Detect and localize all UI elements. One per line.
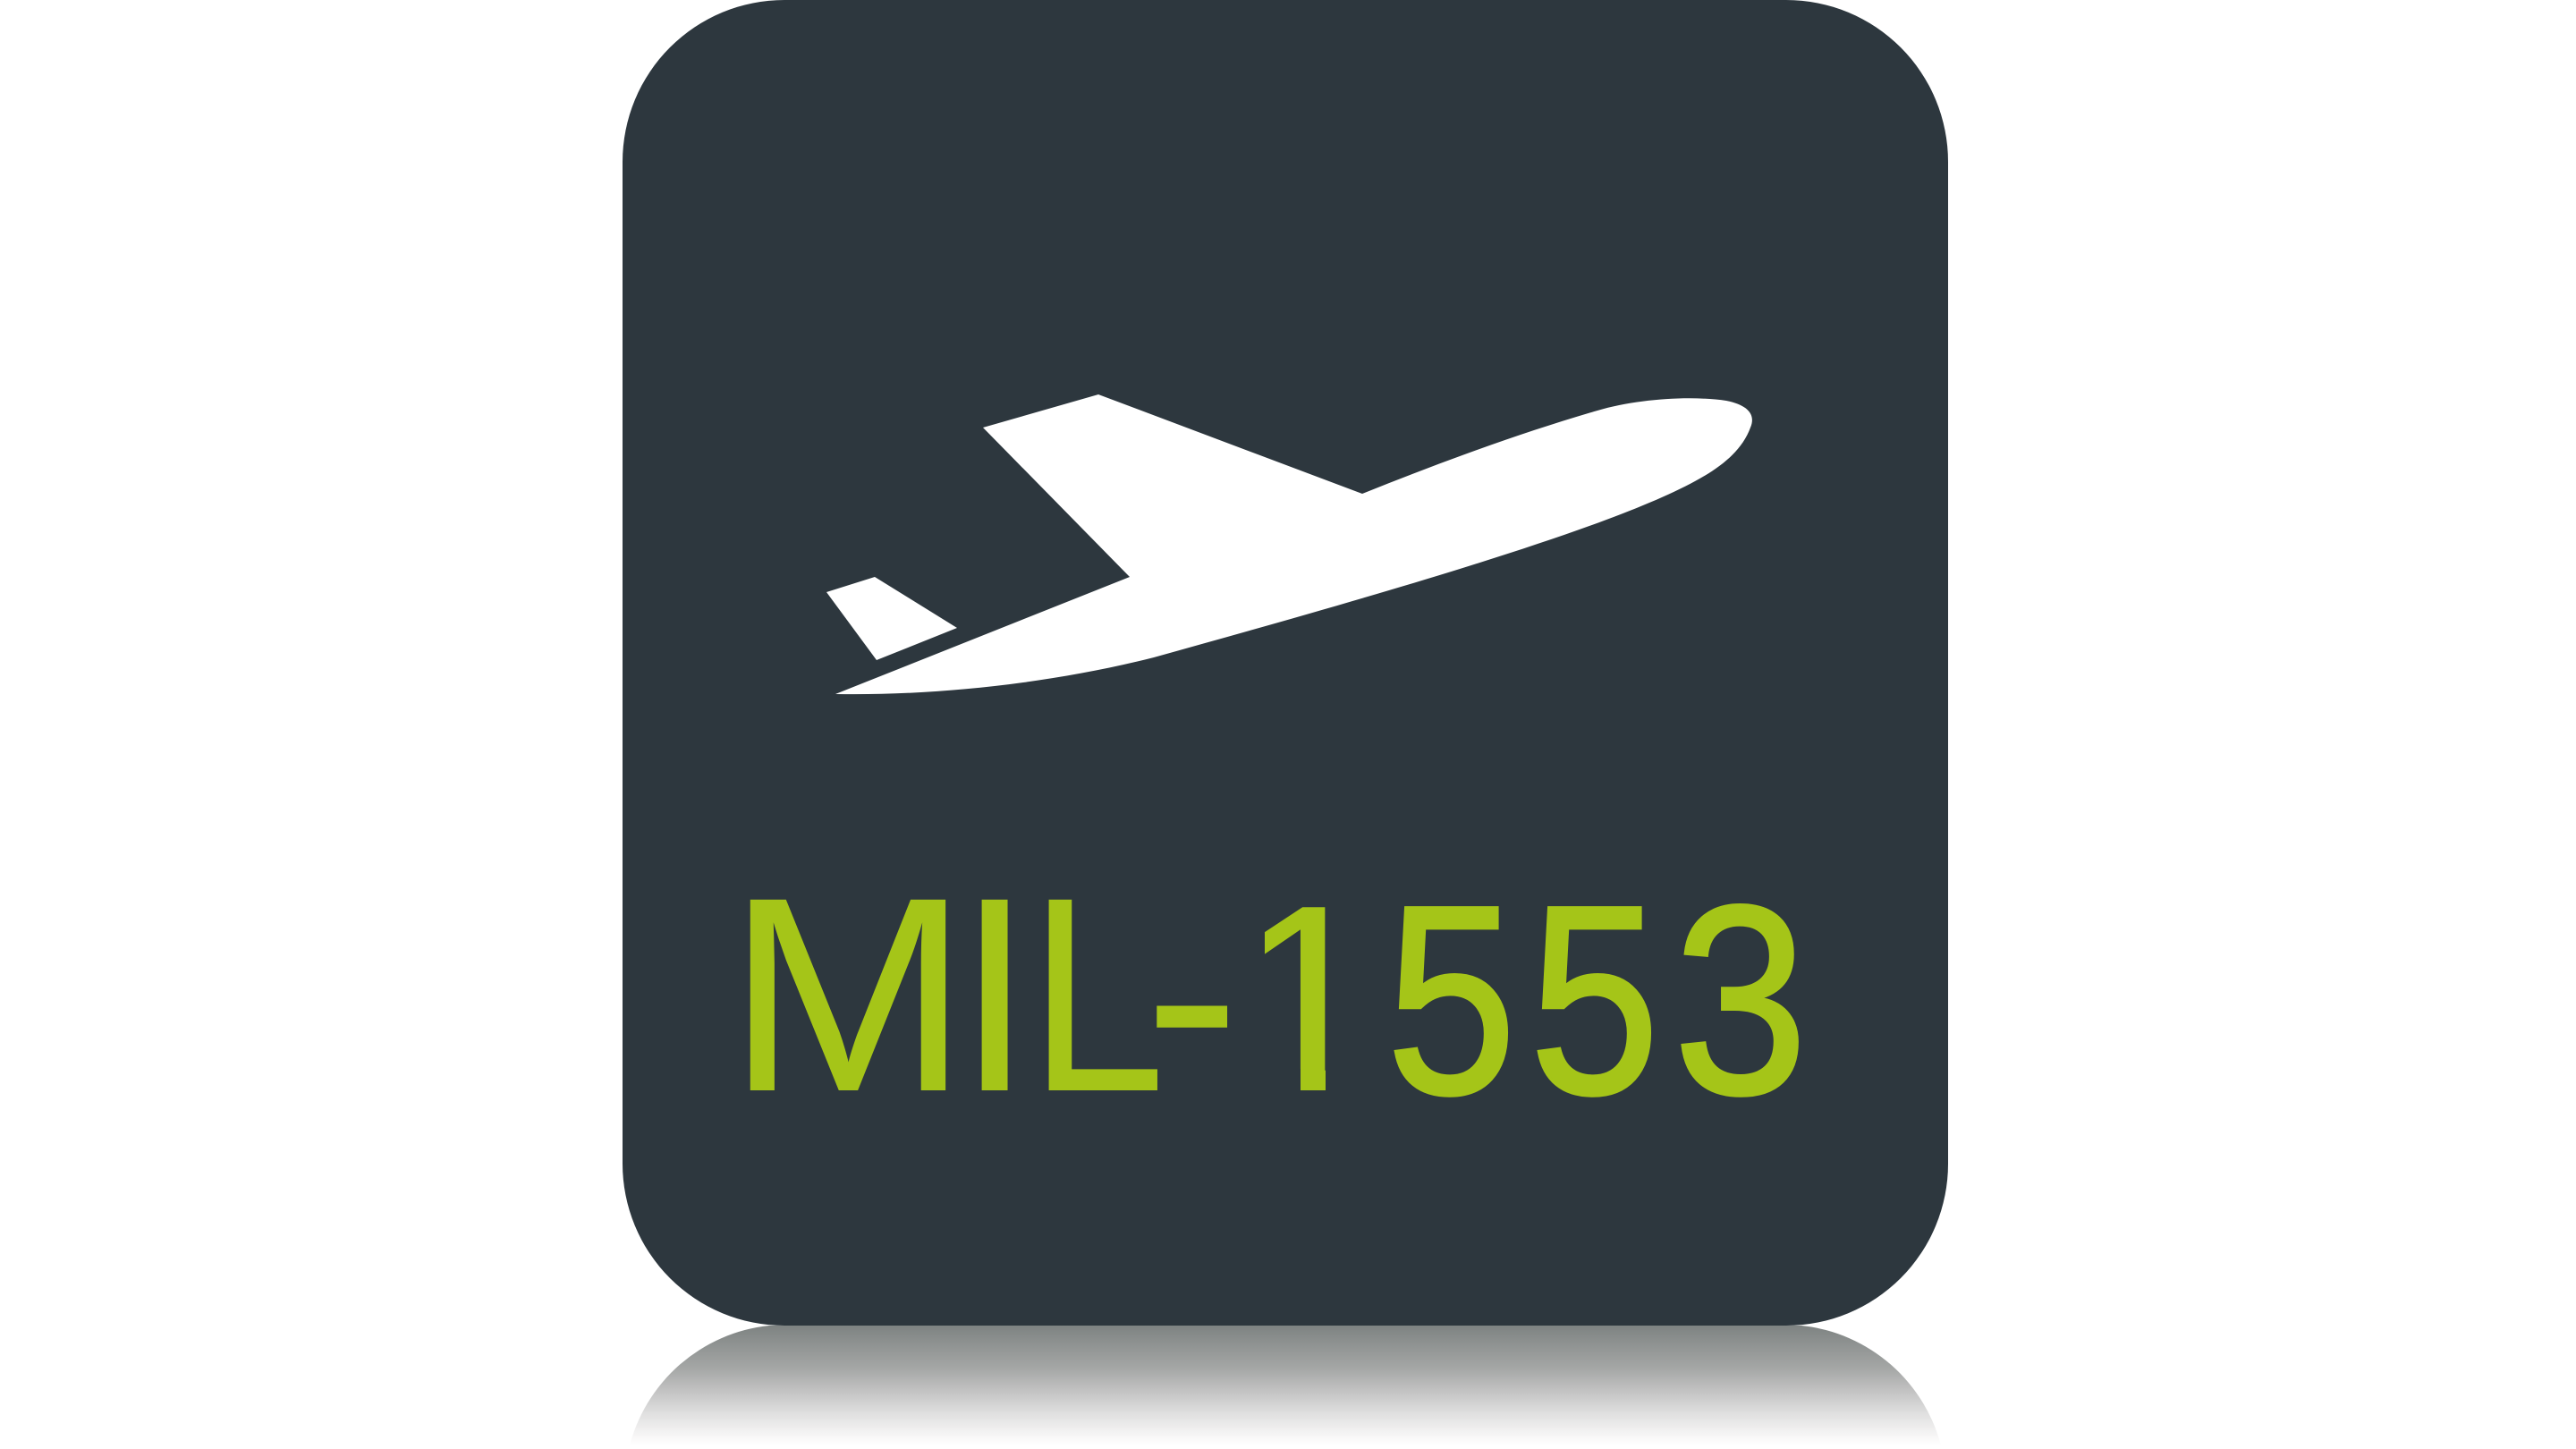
title: MIL-1553: L <box>1029 839 1165 1149</box>
title: MIL-1553: - <box>1144 839 1240 1149</box>
title: MIL-1553: 5 <box>1530 849 1659 1150</box>
title: MIL-1553: 1 <box>1231 849 1385 1147</box>
plane fuselage and wing <box>835 394 1752 694</box>
title: MIL-1553: I <box>956 839 1033 1149</box>
plane tail fin <box>826 577 957 660</box>
badge panel <box>623 0 1948 1326</box>
title: MIL-1553: M <box>726 839 970 1149</box>
title: MIL-1553: 5 <box>1386 849 1516 1150</box>
title: MIL-1553: 3 <box>1674 849 1808 1150</box>
title: MIL-1553 <box>750 900 1799 1097</box>
